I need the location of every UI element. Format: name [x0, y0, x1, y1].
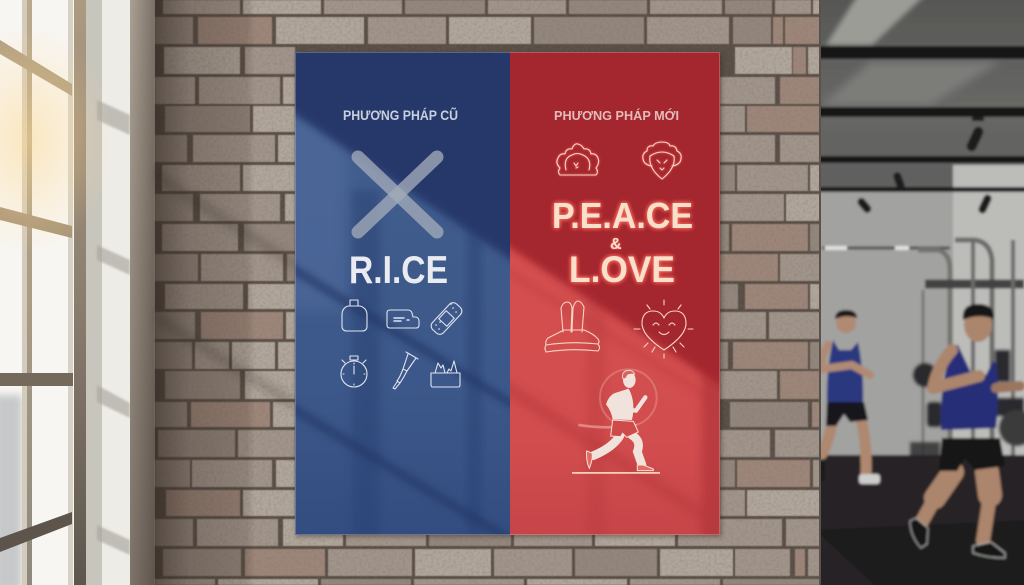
front arm — [629, 397, 645, 411]
wall left — [815, 190, 953, 460]
title: ampersand: & — [610, 236, 622, 253]
tank top — [827, 340, 863, 402]
window frame — [0, 0, 86, 585]
title: R.I.CE: R.I.CE — [349, 249, 448, 292]
window glass — [0, 0, 74, 585]
back leg — [593, 436, 620, 456]
wall edge shade — [819, 0, 821, 585]
poster — [295, 52, 720, 535]
brick wall — [155, 0, 820, 585]
hair — [835, 310, 857, 319]
head — [836, 313, 856, 333]
wall right — [953, 165, 1024, 460]
panel edge — [296, 52, 720, 534]
front leg — [632, 435, 642, 465]
vertical shadow bars — [590, 307, 602, 470]
window reveal — [86, 0, 102, 585]
torso — [606, 389, 633, 420]
light and shadow on navy panel — [295, 52, 510, 535]
shoes — [859, 474, 880, 484]
red background — [510, 52, 720, 535]
ceiling light panel — [826, 0, 925, 45]
icon: runner — [578, 369, 657, 471]
hair — [622, 370, 635, 379]
icon: pillow with raised legs — [545, 301, 600, 352]
title: P.E.A.CE: P.E.A.CE — [552, 195, 693, 236]
weights — [910, 350, 1024, 458]
icon: ice box — [431, 361, 460, 387]
top dark area — [295, 52, 510, 262]
person: background runner — [820, 310, 880, 484]
person: foreground runner — [910, 304, 1020, 558]
ceiling — [815, 0, 1024, 195]
shoes — [910, 518, 928, 548]
head — [623, 372, 636, 388]
icon: compression band — [387, 310, 419, 328]
heading: PHƯƠNG PHÁP MỚI: PHƯƠNG PHÁP MỚI — [554, 108, 679, 123]
arms — [822, 345, 870, 375]
icon: bandage — [429, 301, 464, 336]
icon: elevation heart — [643, 142, 681, 179]
title: L.OVE: L.OVE — [569, 249, 675, 290]
heading: PHƯƠNG PHÁP CŨ: PHƯƠNG PHÁP CŨ — [343, 108, 458, 123]
head — [964, 308, 992, 342]
ceiling beams — [815, 46, 1024, 192]
window shadows across wall — [155, 168, 295, 412]
icon: swelling protection — [557, 144, 599, 175]
far arm — [996, 386, 1020, 388]
hair — [963, 304, 994, 320]
floor — [815, 455, 1024, 585]
panel: new method — [510, 52, 720, 535]
diagonal shadow bars — [295, 263, 510, 408]
vertical shadow bars — [352, 191, 378, 476]
top dark area — [510, 52, 720, 387]
light and shadow on red panel — [510, 52, 720, 535]
left light strip — [296, 122, 342, 304]
brick texture — [155, 0, 820, 585]
motion circle — [600, 369, 657, 426]
navy background — [295, 52, 510, 535]
wall shading — [155, 0, 255, 585]
shorts — [611, 420, 638, 437]
reveal shadows — [97, 100, 130, 555]
tank top — [941, 345, 998, 430]
gym background — [815, 0, 1024, 585]
sun flare — [0, 25, 113, 255]
legs — [935, 472, 953, 498]
barbell rack — [822, 240, 1024, 480]
icon: smiling heart — [634, 300, 693, 358]
ground line — [572, 472, 660, 474]
city view through window — [0, 395, 22, 585]
legs — [822, 418, 866, 474]
icon: bottle — [342, 300, 367, 331]
motion band — [578, 425, 637, 427]
diagonal shadow bars — [510, 384, 694, 510]
poster shadow — [296, 54, 722, 537]
window and side wall — [0, 0, 155, 585]
shoes — [587, 451, 653, 471]
icon: crutch — [393, 352, 418, 389]
icon: stopwatch — [341, 356, 367, 387]
shorts — [826, 402, 868, 426]
arm — [933, 350, 979, 388]
icon: big X — [358, 157, 437, 232]
side wall strip — [130, 0, 155, 585]
spot lights — [856, 116, 993, 215]
shorts — [939, 438, 1005, 471]
panel: old method — [295, 52, 510, 535]
